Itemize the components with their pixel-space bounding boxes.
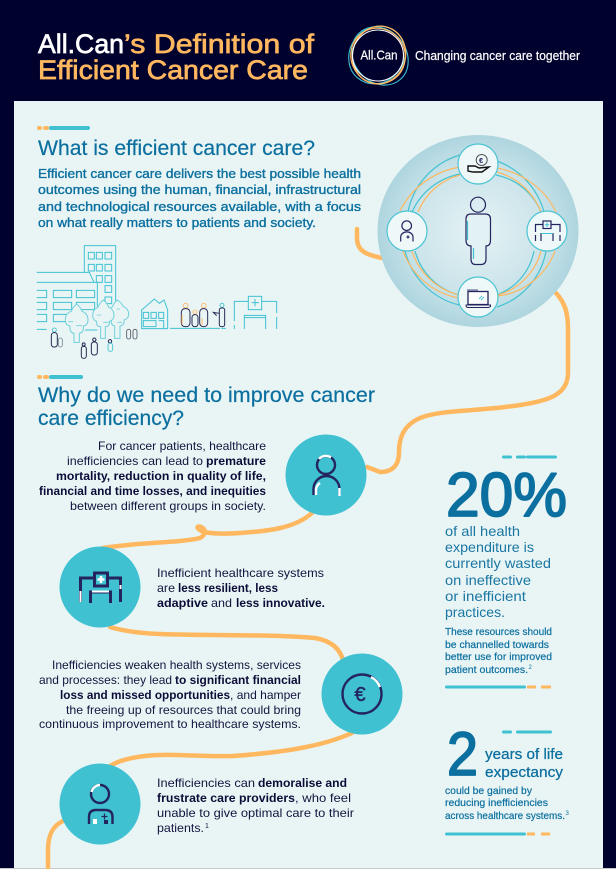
stat: 2 years of life expectancy — [445, 720, 570, 836]
definition paragraph — [38, 166, 362, 230]
header title: ’s Definition of — [124, 29, 315, 59]
icon circle: hospital — [60, 546, 140, 628]
text: healthcare systems: are — [157, 581, 175, 595]
stat: 2 years of life expectancy: 3 — [566, 811, 570, 817]
text: financial loss: the freeing up of resources that could bring — [66, 703, 301, 717]
illustration: city, people and clinic — [37, 246, 277, 358]
stat: 20 percent: expenditure is — [445, 539, 534, 555]
icon: money in hand: € — [479, 156, 484, 165]
text: care providers: demoralise and — [258, 776, 347, 790]
clinic — [234, 296, 277, 329]
stat: 2 years of life expectancy: 2 — [447, 720, 478, 788]
text: care providers: frustrate care providers — [157, 791, 295, 805]
low building — [37, 272, 97, 330]
text: financial loss: to significant financial — [175, 673, 301, 687]
stat: 2 years of life expectancy: years of life — [485, 746, 563, 763]
heading: why improve efficiency — [38, 383, 375, 430]
text: impact on patients: premature — [206, 454, 266, 468]
icon circle: care provider — [60, 764, 140, 844]
text: impact on patients — [39, 439, 266, 513]
stat: 20 percent: currently wasted — [445, 555, 551, 571]
text: financial loss: , and hamper — [230, 688, 301, 702]
text: impact on patients: inefficiencies can lead to — [67, 454, 203, 468]
text: care providers: patients. — [157, 821, 204, 835]
text: care providers: unable to give optimal care to their — [157, 806, 354, 820]
stat: 2 years of life expectancy: could be gained by — [445, 785, 533, 797]
text: healthcare systems: less innovative. — [236, 596, 325, 610]
text: financial loss: Inefficiencies weaken health systems, services — [52, 658, 301, 672]
text: healthcare systems: and — [211, 596, 232, 610]
logo: All.Can rings and tagline: All.Can — [360, 48, 398, 62]
text: impact on patients: between different groups in society. — [70, 499, 266, 513]
icon: laptop — [458, 277, 498, 317]
text: impact on patients: mortality, reduction in quality of life, — [56, 469, 266, 483]
text: care providers — [157, 776, 354, 835]
stat: 20 percent: on ineffective — [445, 572, 531, 588]
text: healthcare systems — [157, 566, 325, 610]
text: healthcare systems: less resilient, less — [178, 581, 278, 595]
icon: money in hand — [458, 144, 498, 184]
stat: 20 percent: or inefficient — [445, 588, 526, 604]
text: healthcare systems: adaptive — [157, 596, 208, 610]
text: financial loss: loss and missed opportunities — [60, 688, 230, 702]
logo: All.Can rings and tagline: Changing cancer care together — [415, 49, 580, 63]
heading: why improve efficiency: care efficiency? — [38, 406, 184, 430]
header title: All.Can — [38, 29, 124, 59]
definition paragraph: on what really matters to patients and society. — [38, 215, 316, 230]
definition paragraph: and technological resources available, with a focus — [38, 199, 362, 214]
stat: 20 percent: practices. — [445, 604, 505, 620]
stat: 2 years of life expectancy: reducing inefficiencies — [445, 797, 548, 809]
house — [142, 299, 168, 329]
text: financial loss: and processes: they lead — [39, 673, 172, 687]
stat: 20 percent: be channelled towards — [445, 639, 549, 651]
diagram: patient surrounded by four resources — [378, 135, 578, 327]
text: impact on patients: For cancer patients, healthcare — [98, 439, 266, 453]
text: healthcare systems: Inefficient healthcare systems — [157, 566, 324, 580]
stat: 20 percent: patient outcomes. — [445, 664, 528, 676]
header title: Efficient Cancer Care — [38, 55, 308, 85]
stat: 2 years of life expectancy: across healthcare systems. — [445, 810, 565, 822]
text: financial loss — [39, 658, 301, 731]
text: care providers: 1 — [205, 823, 209, 830]
logo: All.Can rings and tagline — [337, 15, 580, 96]
text: financial loss: continuous improvement to healthcare systems. — [39, 717, 301, 731]
icon circle: euro — [322, 654, 402, 734]
trees — [65, 300, 129, 342]
family with doctor — [170, 303, 226, 328]
orange connecting path — [48, 229, 568, 869]
tower block — [84, 246, 116, 304]
stat: 20 percent: of all health — [445, 523, 520, 539]
stat: 20 percent: 20% — [446, 461, 567, 530]
stat: 20 percent: 2 — [528, 665, 532, 671]
icon: hospital — [527, 211, 567, 251]
stat: 20 percent: better use for improved — [445, 651, 552, 663]
text: care providers: Inefficiencies can — [157, 776, 255, 790]
text: impact on patients: financial and time losses, and inequities — [39, 484, 266, 498]
icon circle: patient — [286, 434, 366, 516]
heading: why improve efficiency: Why do we need to improve cancer — [38, 383, 375, 407]
header title — [38, 29, 315, 85]
section accent bar: what is — [37, 126, 90, 130]
icon: care provider — [387, 211, 427, 251]
text: care providers: , who feel — [295, 791, 351, 805]
definition paragraph: outcomes using the human, financial, infrastructural — [38, 182, 361, 197]
definition paragraph: Efficient cancer care delivers the best possible health — [38, 166, 361, 181]
pedestrians — [51, 328, 137, 358]
icon: central person — [466, 197, 490, 264]
stat: 20 percent: These resources should — [445, 626, 552, 638]
stat: 2 years of life expectancy: expectancy — [485, 764, 564, 781]
heading: what is efficient cancer care: What is efficient cancer care? — [38, 136, 315, 160]
section accent bar: why — [37, 375, 83, 379]
stat: 20 percent — [445, 456, 567, 688]
icon circle: euro: € — [354, 684, 366, 706]
